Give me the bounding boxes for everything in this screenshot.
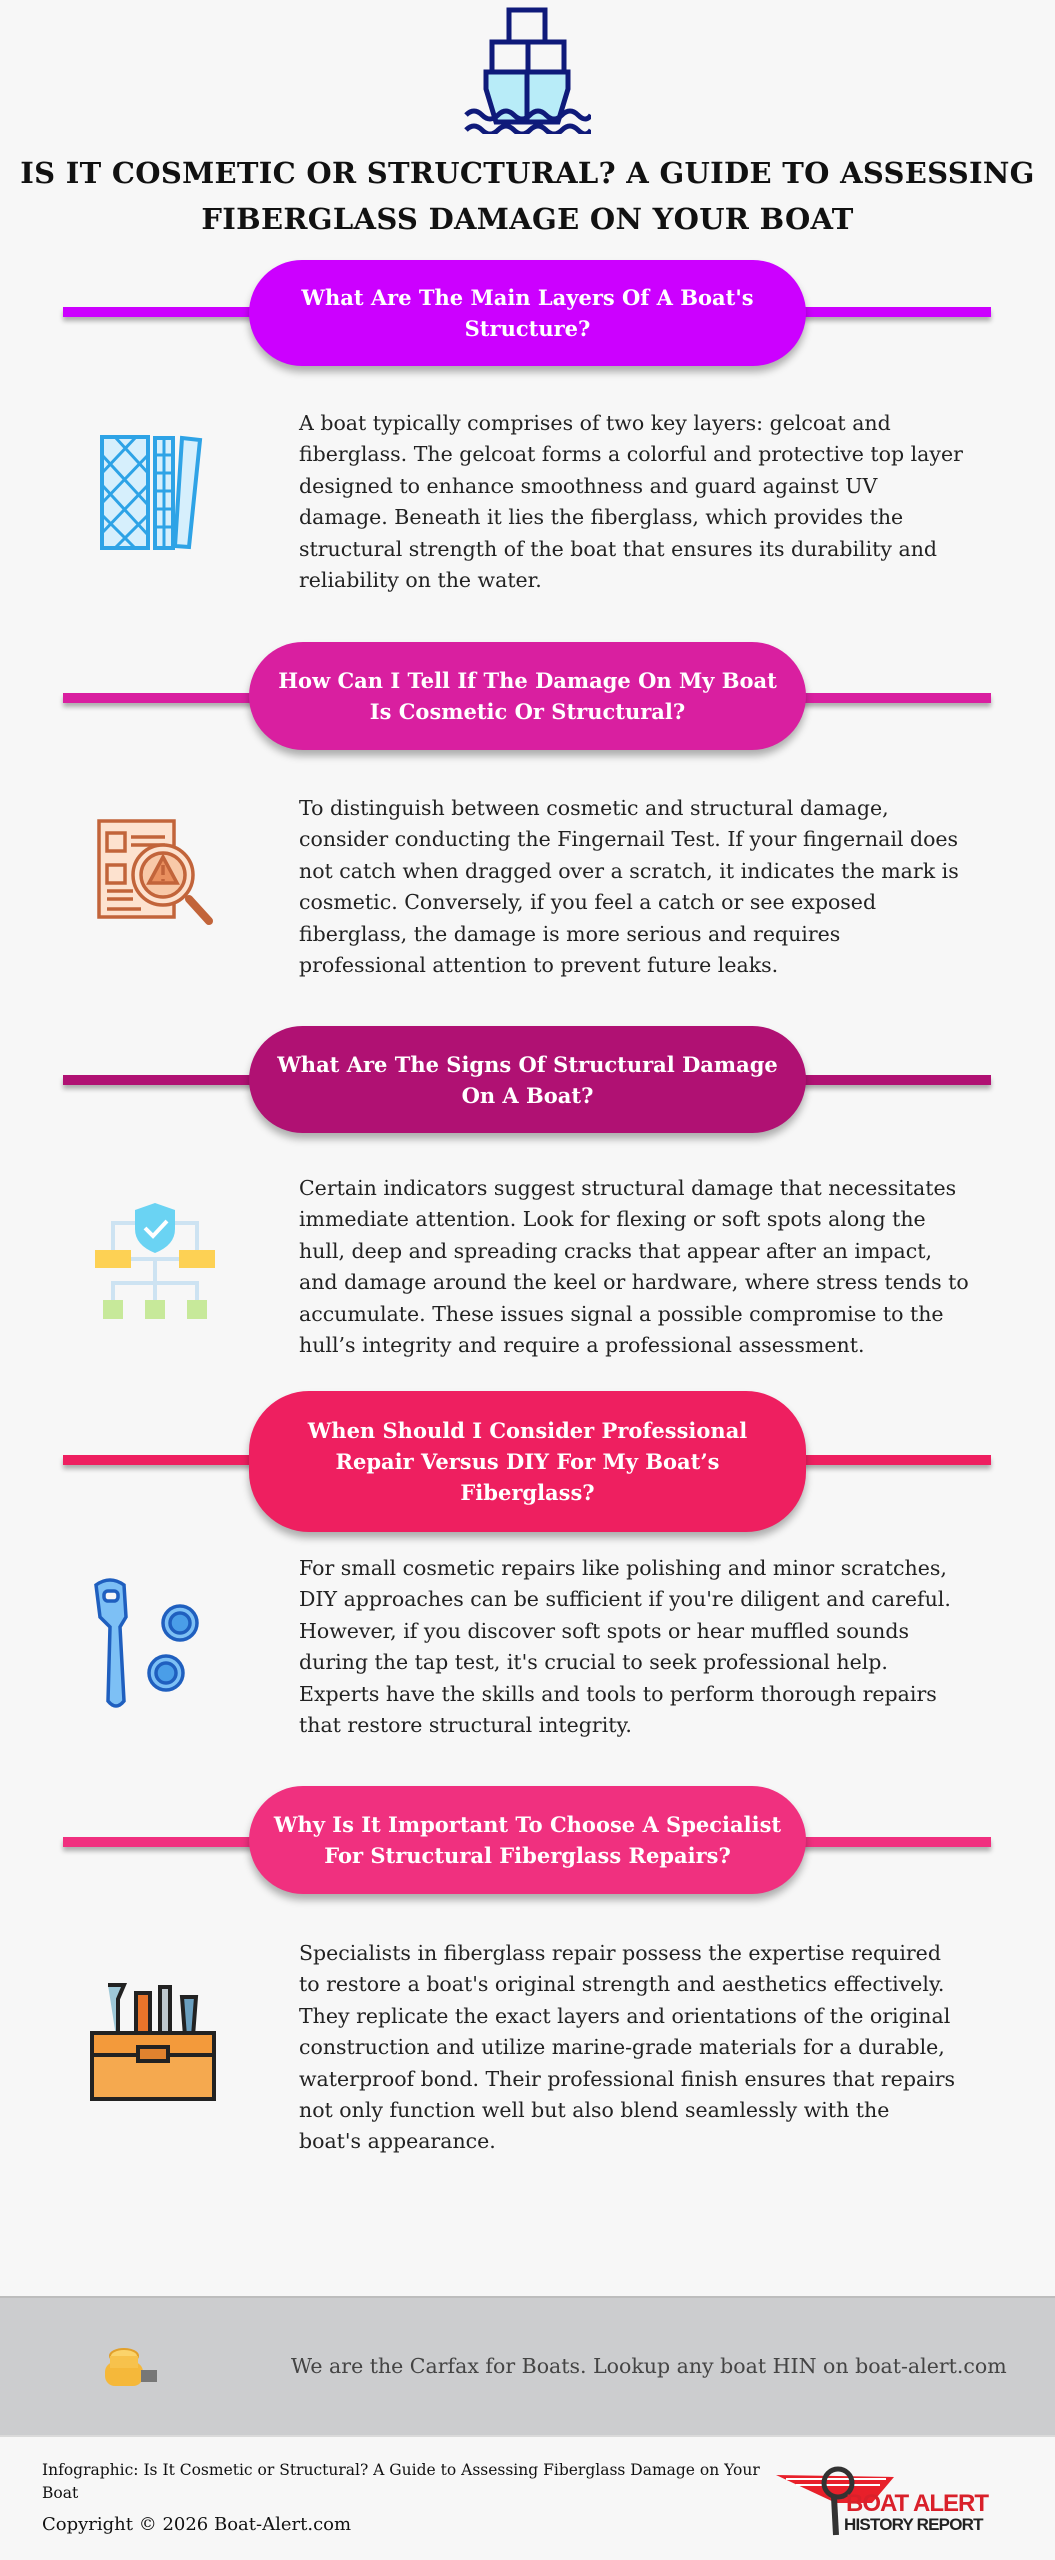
- text 3: accumulate. These issues signal a possible compromise to the: [299, 1302, 944, 1326]
- text 3: hull, deep and spreading cracks that appear after an impact,: [299, 1239, 932, 1263]
- section 1 line: [63, 307, 991, 317]
- text 2: [299, 796, 959, 977]
- logo: HISTORY REPORT: [844, 2515, 983, 2534]
- text 5: not only function well but also blend seamlessly with the: [299, 2098, 889, 2122]
- text 3: immediate attention. Look for flexing or soft spots along the: [299, 1207, 926, 1231]
- text 3: [299, 1176, 969, 1357]
- heading 1: [249, 260, 806, 366]
- text 2: To distinguish between cosmetic and structural damage,: [299, 796, 889, 820]
- heading 4: [249, 1391, 806, 1532]
- text 4: during the tap test, it's crucial to seek professional help.: [299, 1650, 888, 1674]
- text 4: Experts have the skills and tools to perform thorough repairs: [299, 1682, 937, 1706]
- heading 3: [249, 1026, 806, 1133]
- heading 3: On A Boat?: [462, 1082, 593, 1108]
- text 1: A boat typically comprises of two key layers: gelcoat and: [299, 411, 891, 435]
- heading 2: How Can I Tell If The Damage On My Boat: [278, 668, 777, 693]
- icon: opener and caps: [94, 1578, 199, 1708]
- text 4: For small cosmetic repairs like polishing and minor scratches,: [299, 1556, 947, 1580]
- logo: [776, 2466, 989, 2536]
- heading 5: Why Is It Important To Choose A Specialist: [274, 1812, 781, 1837]
- text 5: to restore a boat's original strength and aesthetics effectively.: [299, 1972, 944, 1996]
- heading 3: What Are The Signs Of Structural Damage: [277, 1052, 778, 1076]
- text 5: construction and utilize marine-grade materials for a durable,: [299, 2035, 945, 2059]
- text 4: However, if you discover soft spots or hear muffled sounds: [299, 1619, 909, 1643]
- heading 5: For Structural Fiberglass Repairs?: [324, 1843, 731, 1868]
- text 1: damage. Beneath it lies the fiberglass, which provides the: [299, 505, 903, 529]
- footer band: [0, 2296, 1055, 2437]
- footer caption: Infographic: Is It Cosmetic or Structural? A Guide to Assessing Fiberglass Damage on Your Boat: [42, 2461, 760, 2502]
- icon: report magnifier: [97, 819, 213, 925]
- text 5: Specialists in fiberglass repair possess the expertise required: [299, 1941, 941, 1965]
- title: FIBERGLASS DAMAGE ON YOUR BOAT: [201, 202, 854, 236]
- text 1: [298, 411, 963, 592]
- text 2: fiberglass, the damage is more serious and requires: [299, 922, 840, 946]
- text 4: that restore structural integrity.: [299, 1713, 632, 1737]
- text 4: [299, 1556, 951, 1737]
- icon: toolbox: [90, 1983, 216, 2101]
- heading 1: What Are The Main Layers Of A Boat's: [301, 285, 754, 310]
- section 2 line: [63, 693, 991, 703]
- text 2: not catch when dragged over a scratch, it indicates the mark is: [299, 859, 959, 883]
- heading 2: Is Cosmetic Or Structural?: [370, 699, 685, 724]
- section 3 line: [63, 1075, 991, 1085]
- text 1: reliability on the water.: [299, 568, 542, 592]
- text 5: boat's appearance.: [299, 2129, 496, 2153]
- text 3: hull’s integrity and require a professional assessment.: [299, 1333, 864, 1357]
- tagline: We are the Carfax for Boats. Lookup any boat HIN on boat-alert.com: [291, 2354, 1007, 2378]
- text 3: Certain indicators suggest structural damage that necessitates: [299, 1176, 956, 1200]
- heading 4: Fiberglass?: [460, 1480, 595, 1505]
- text 3: and damage around the keel or hardware, where stress tends to: [299, 1270, 969, 1294]
- text 1: structural strength of the boat that ensures its durability and: [299, 537, 937, 561]
- text 2: cosmetic. Conversely, if you feel a catch or see exposed: [299, 890, 876, 914]
- icon: hierarchy shield: [95, 1203, 215, 1319]
- section 4 line: [63, 1455, 991, 1465]
- icon: boat: [464, 8, 591, 134]
- heading 5: [249, 1786, 806, 1894]
- text 2: professional attention to prevent future leaks.: [299, 953, 778, 977]
- text 2: consider conducting the Fingernail Test. If your fingernail does: [299, 827, 958, 851]
- text 4: DIY approaches can be sufficient if you're diligent and careful.: [299, 1587, 951, 1611]
- section 5 line: [63, 1837, 991, 1847]
- icon: tape measure: [105, 2348, 157, 2386]
- text 5: They replicate the exact layers and orientations of the original: [299, 2004, 950, 2028]
- heading 1: Structure?: [465, 316, 590, 341]
- heading 4: When Should I Consider Professional: [308, 1418, 747, 1443]
- text 1: designed to enhance smoothness and guard against UV: [299, 474, 877, 498]
- text 5: waterproof bond. Their professional finish ensures that repairs: [299, 2067, 955, 2091]
- text 1: fiberglass. The gelcoat forms a colorful and protective top layer: [299, 442, 963, 466]
- heading 4: Repair Versus DIY For My Boat’s: [336, 1449, 719, 1474]
- copyright: Copyright © 2026 Boat-Alert.com: [42, 2514, 351, 2535]
- logo: BOAT ALERT: [846, 2490, 988, 2517]
- heading 2: [249, 642, 806, 750]
- title: IS IT COSMETIC OR STRUCTURAL? A GUIDE TO ASSESSING: [20, 156, 1035, 190]
- icon: fiberglass layers: [100, 435, 202, 550]
- text 5: [299, 1941, 955, 2153]
- title: [20, 156, 1035, 236]
